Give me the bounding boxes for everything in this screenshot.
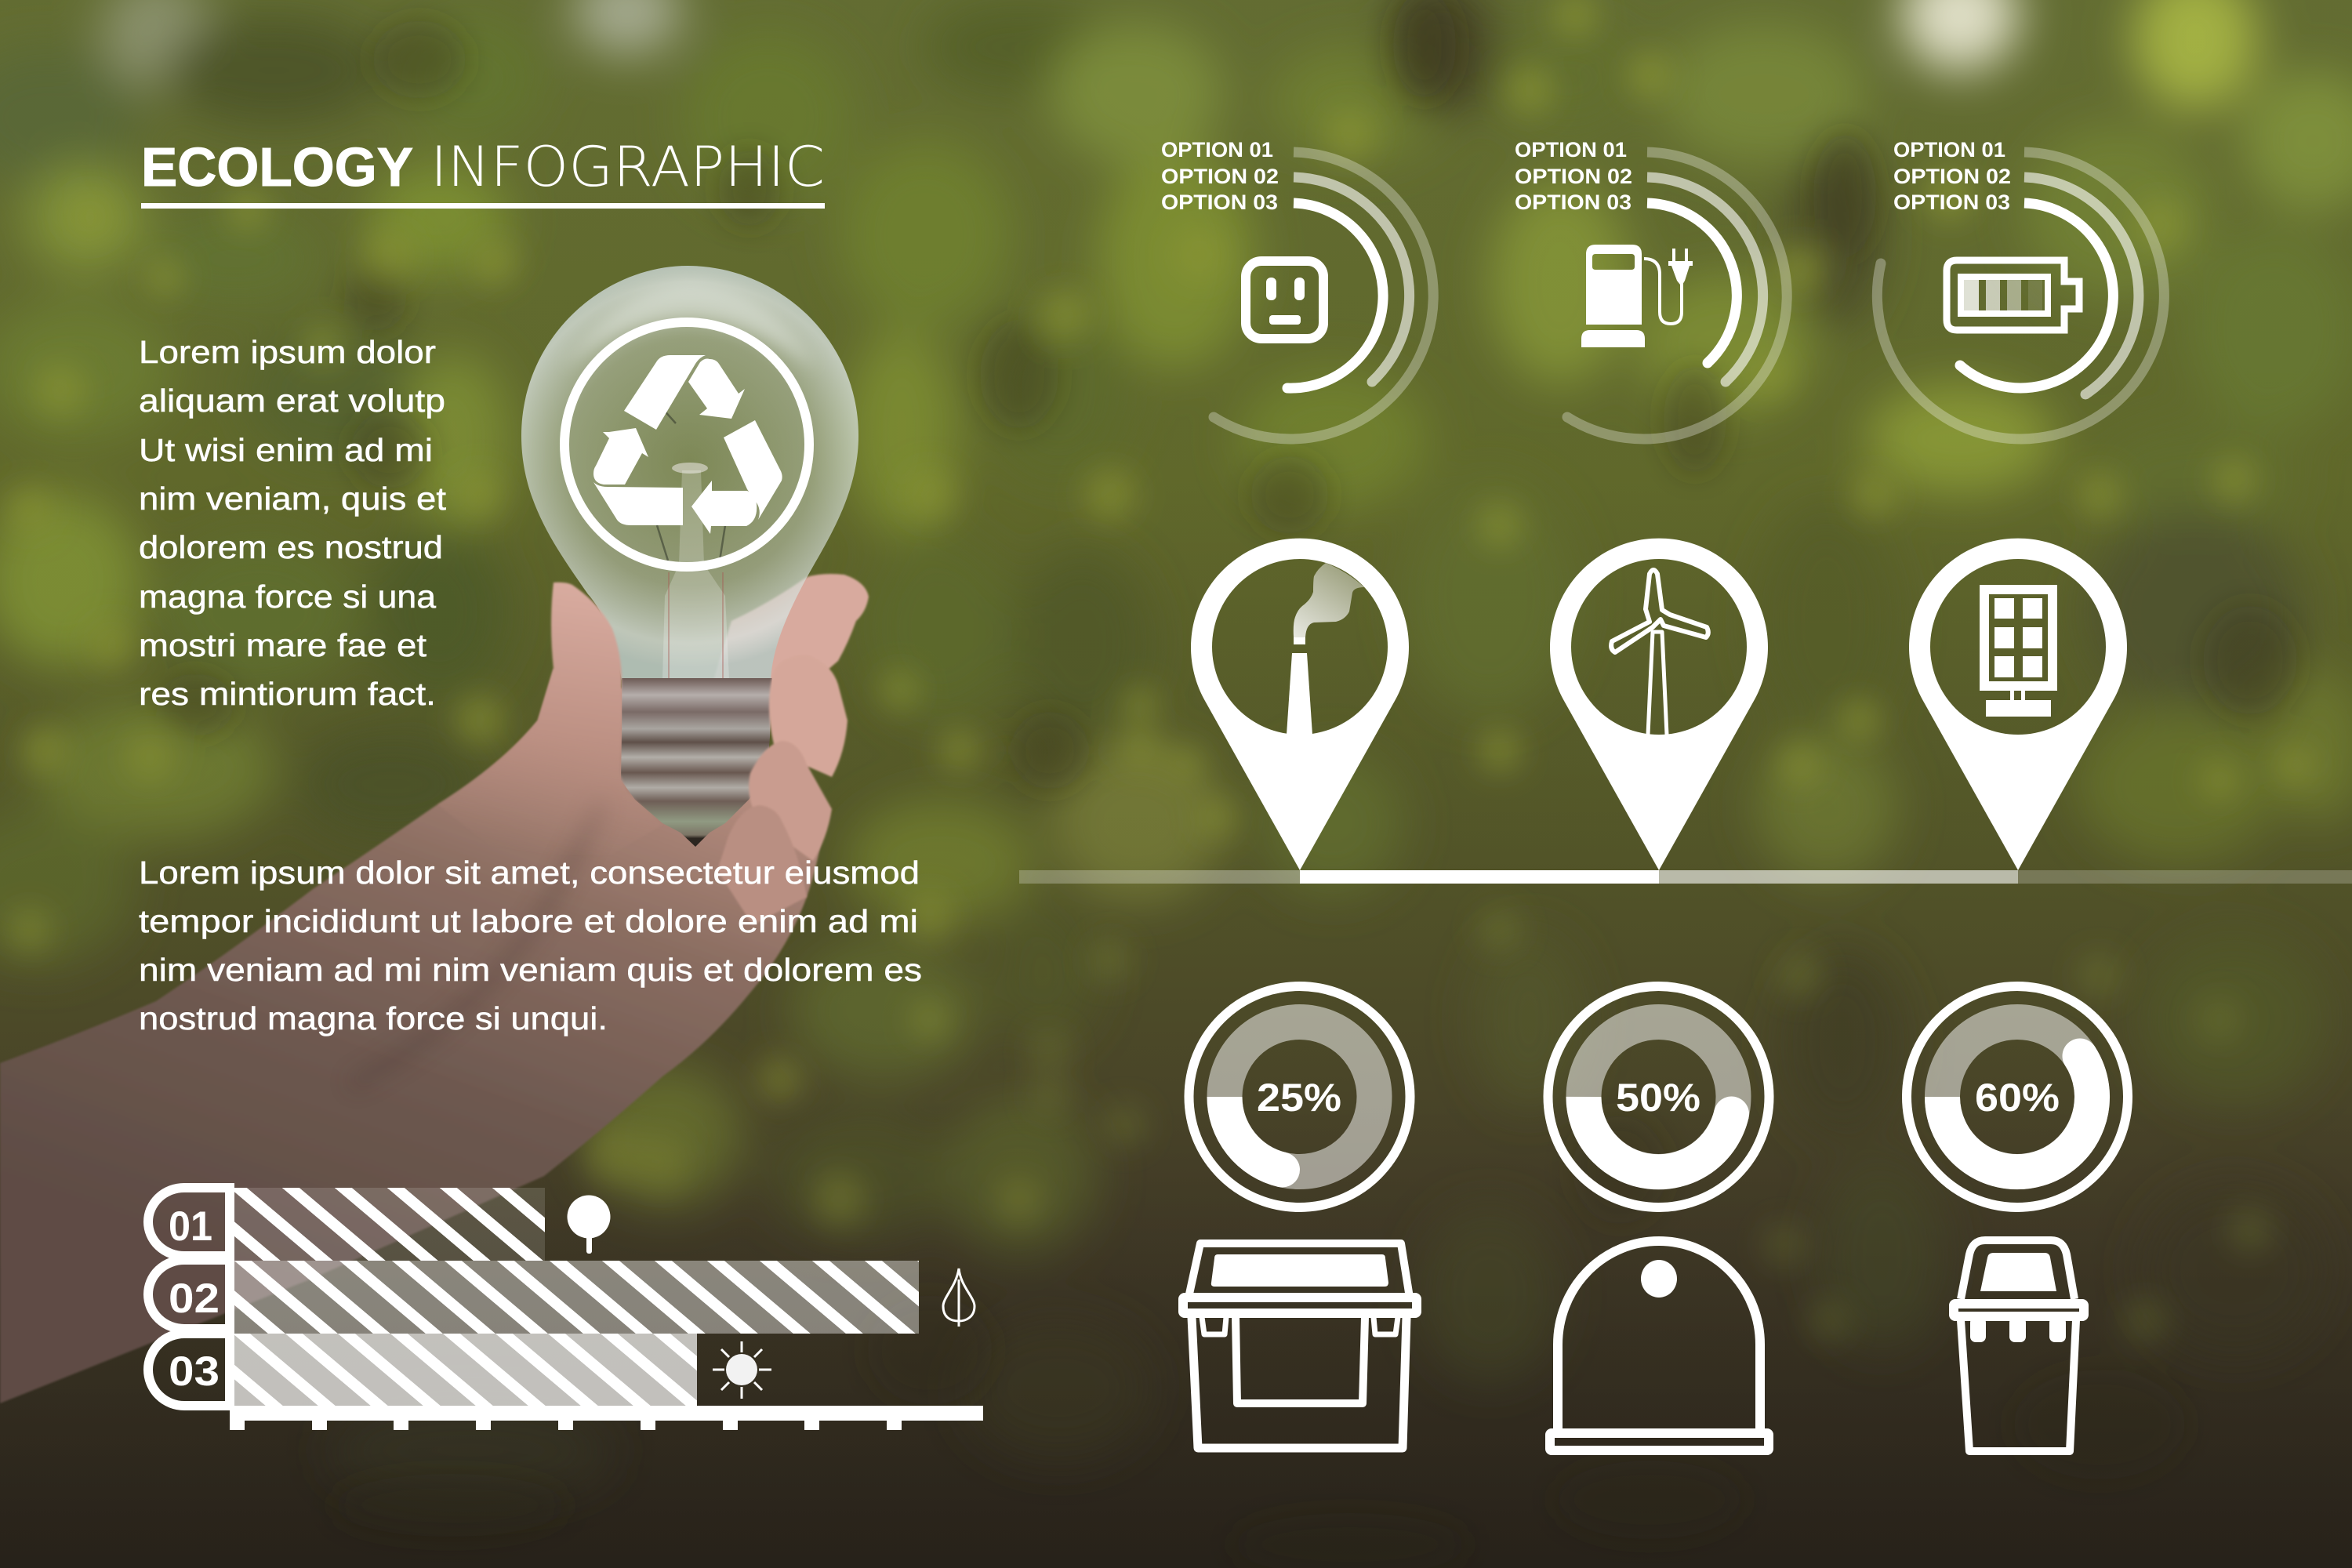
text block: bulb paragraph: res mintiorum fact. xyxy=(139,676,436,712)
text block: bulb paragraph: mostri mare fae et xyxy=(139,627,427,663)
thumb and fingers in front of the bulb xyxy=(437,583,848,925)
text block: lower paragraph: tempor incididunt ut labore et dolore enim ad mi xyxy=(139,903,918,939)
arc: option 03 xyxy=(1955,203,2113,388)
glass stem xyxy=(662,463,729,679)
glass highlights xyxy=(564,282,815,368)
palm crease xyxy=(350,800,604,1085)
donut chart: 25%: 25% xyxy=(1257,1076,1341,1120)
tab 03 xyxy=(148,1334,230,1406)
axis with ticks xyxy=(230,1406,983,1430)
donut chart: 60% xyxy=(1907,986,2128,1207)
text block: bulb paragraph: dolorem es nostrud xyxy=(139,529,443,565)
tab 01 xyxy=(148,1188,230,1256)
icon: narrow recycling bin xyxy=(1954,1240,2084,1451)
donut chart: 25% xyxy=(1189,986,1410,1207)
text block: lower paragraph: nostrud magna force si unqui. xyxy=(139,1000,608,1036)
arc: option 03 xyxy=(1283,203,1383,394)
option labels xyxy=(1515,138,1632,214)
map pin: solar panel xyxy=(1909,539,2127,870)
title xyxy=(141,135,825,209)
bulb glass xyxy=(521,266,858,681)
bar 02 xyxy=(234,1261,919,1334)
option labels: OPTION 01 xyxy=(1893,138,2005,162)
option labels: OPTION 03 xyxy=(1161,191,1278,214)
icon: battery xyxy=(1947,260,2079,330)
option labels: OPTION 02 xyxy=(1893,165,2011,188)
tab 01: 01 xyxy=(169,1203,212,1250)
icon: recycling symbol in circle xyxy=(564,322,809,567)
text block: bulb paragraph: magna force si una xyxy=(139,579,436,615)
tab 02: 02 xyxy=(169,1276,220,1322)
filament wires xyxy=(657,408,725,561)
arc: option 02 xyxy=(1647,177,1763,387)
text block: lower paragraph xyxy=(139,855,922,1036)
map pin: wind turbine xyxy=(1550,539,1768,870)
gauge: charging station options xyxy=(1515,138,1787,439)
icon: wall socket xyxy=(1246,261,1323,339)
icon: charging station xyxy=(1581,245,1693,347)
option labels: OPTION 03 xyxy=(1515,191,1632,214)
turbine tower xyxy=(1648,632,1667,735)
text block: lower paragraph: nim veniam ad mi nim veniam quis et dolorem es xyxy=(139,952,922,988)
bar 01 xyxy=(234,1188,545,1261)
light bulb xyxy=(521,266,858,847)
arc: option 02 xyxy=(1294,177,1410,387)
arc: option 01 xyxy=(1875,152,2164,439)
text block: lower paragraph: Lorem ipsum dolor sit amet, consectetur eiusmod xyxy=(139,855,920,891)
option labels: OPTION 02 xyxy=(1515,165,1632,188)
option labels: OPTION 01 xyxy=(1515,138,1627,162)
screw base xyxy=(621,678,772,847)
option labels xyxy=(1161,138,1279,214)
arc: option 03 xyxy=(1647,203,1737,368)
bar 03 xyxy=(234,1334,697,1406)
timeline bar under pins xyxy=(1019,870,2352,884)
tab 03: 03 xyxy=(169,1348,220,1395)
bar chart with striped bars xyxy=(148,1188,983,1430)
option labels: OPTION 03 xyxy=(1893,191,2010,214)
icon: dome recycling bin xyxy=(1550,1241,1769,1450)
donut chart: 60%: 60% xyxy=(1975,1076,2060,1120)
text block: bulb paragraph: aliquam erat volutp xyxy=(139,383,445,419)
donut chart: 50%: 50% xyxy=(1616,1076,1700,1120)
index finger behind the glass xyxy=(706,574,869,706)
option labels: OPTION 01 xyxy=(1161,138,1273,162)
icon: leaf xyxy=(943,1269,975,1327)
map pin: factory chimney xyxy=(1191,539,1409,870)
text block: bulb paragraph: nim veniam, quis et xyxy=(139,481,447,517)
hand holding the bulb xyxy=(0,574,869,1403)
turbine blades xyxy=(1611,570,1708,652)
icon: wide recycling bin xyxy=(1183,1243,1417,1448)
text block: bulb paragraph: Ut wisi enim ad mi xyxy=(139,432,433,468)
donut chart: 50% xyxy=(1548,986,1769,1207)
title: INFOGRAPHIC xyxy=(430,135,825,199)
icon: tree xyxy=(568,1195,610,1254)
text block: bulb paragraph: Lorem ipsum dolor xyxy=(139,334,436,370)
text block: bulb paragraph xyxy=(139,334,447,712)
title: ECOLOGY xyxy=(141,136,413,198)
arc: option 01 xyxy=(1209,152,1433,439)
option labels xyxy=(1893,138,2011,214)
gauge: battery options xyxy=(1875,138,2164,439)
arc: option 01 xyxy=(1562,152,1787,439)
gauge: socket energy options xyxy=(1161,138,1433,439)
icon: sun xyxy=(713,1341,771,1399)
arc: option 02 xyxy=(2024,177,2139,400)
tab 02 xyxy=(148,1260,230,1329)
option labels: OPTION 02 xyxy=(1161,165,1279,188)
smoke plume xyxy=(1294,563,1364,637)
